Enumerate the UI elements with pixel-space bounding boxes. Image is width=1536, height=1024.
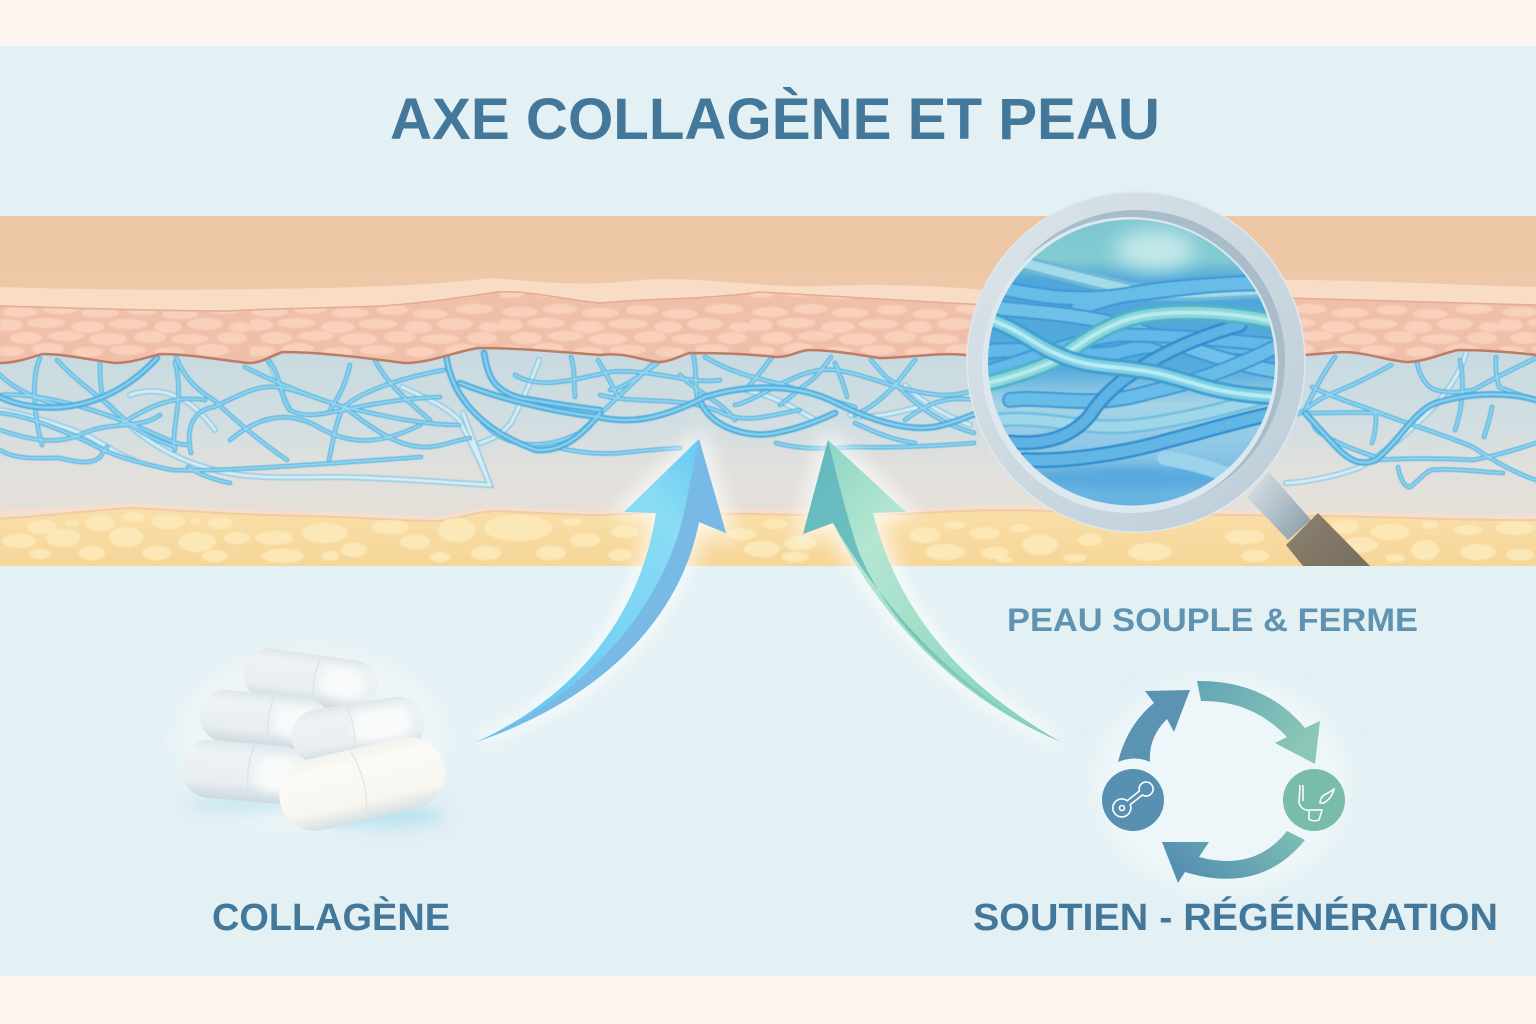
icon: joint circle xyxy=(1283,769,1345,831)
capsule back top xyxy=(240,645,381,715)
arrow: collagen to skin (blue) xyxy=(476,439,726,742)
highlighted strand blue xyxy=(991,320,1280,397)
layer: subcutaneous fat xyxy=(0,503,1536,566)
icon: regeneration cycle xyxy=(1092,675,1352,895)
cycle arrow top right xyxy=(1197,681,1320,764)
layer: dermis xyxy=(0,345,1536,525)
cycle arrow top left xyxy=(1118,690,1190,762)
cycle arrow bottom xyxy=(1162,831,1305,883)
layer: epidermis xyxy=(0,292,1536,363)
capsule middle left xyxy=(197,687,333,753)
icon: collagen capsules xyxy=(172,645,452,838)
icon: magnifying glass xyxy=(967,192,1370,566)
layer: collagen network xyxy=(0,353,1536,487)
capsule bottom left xyxy=(179,737,313,807)
layer: stratum corneum xyxy=(0,216,1536,326)
panel: skin cross-section xyxy=(0,216,1536,575)
label: support and regeneration: SOUTIEN - RÉGÉNÉRATION xyxy=(973,895,1498,939)
magnified collagen fibres xyxy=(985,215,1280,510)
title: AXE COLLAGÈNE ET PEAU xyxy=(390,87,1160,152)
arrow glows xyxy=(476,439,1061,742)
capsule front xyxy=(272,730,452,838)
magnifier handle grip xyxy=(1286,513,1370,566)
label: supple and firm skin: PEAU SOUPLE & FERME xyxy=(1007,602,1418,638)
highlighted strand teal xyxy=(989,312,1280,383)
layer: light surface band xyxy=(0,278,1536,330)
capsule middle right xyxy=(288,693,428,767)
magnifier ring xyxy=(967,192,1305,532)
magnifier handle neck xyxy=(1247,472,1311,540)
icon: bone circle xyxy=(1102,769,1164,831)
arrow: regeneration to skin (green) xyxy=(803,440,1061,742)
label: collagen: COLLAGÈNE xyxy=(212,895,450,939)
